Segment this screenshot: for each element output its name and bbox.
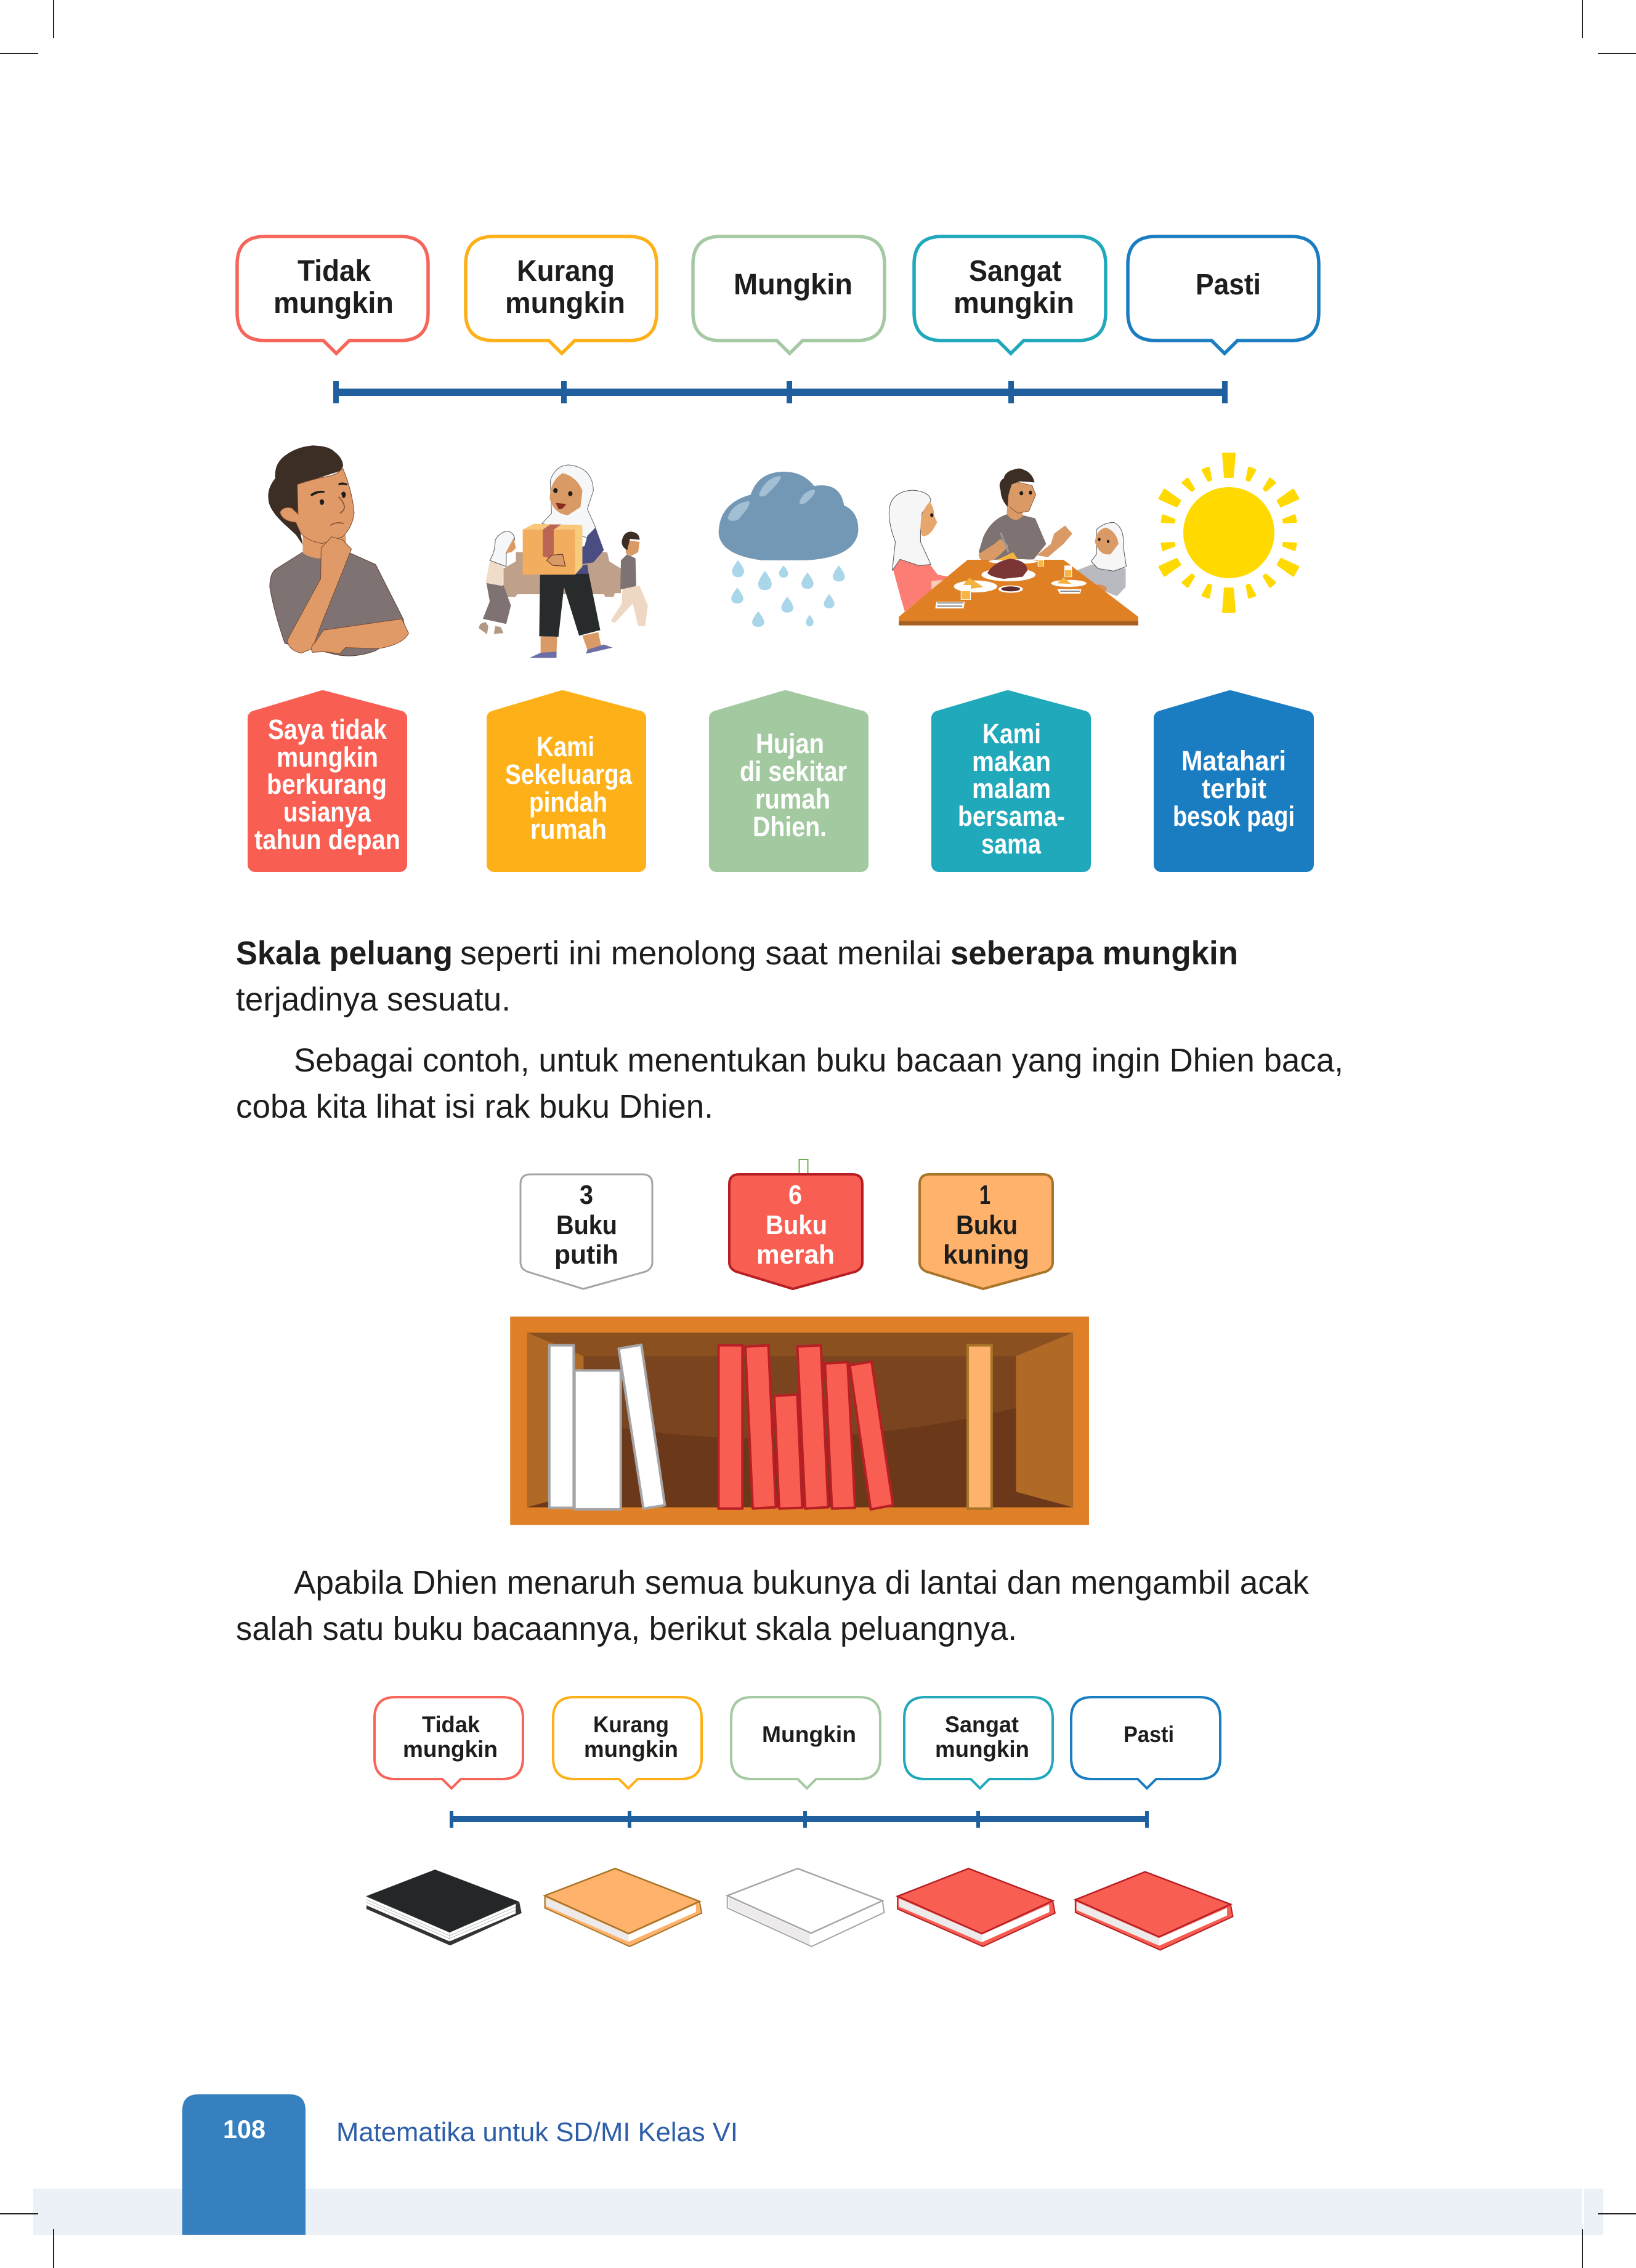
daughter (1076, 522, 1127, 596)
tag: 1 Buku kuning: 1 (979, 1180, 990, 1210)
paragraph: Apabila Dhien: Apabila Dhien menaruh semua bukunya di lantai dan mengambil acak (294, 1564, 1310, 1601)
bubble: Mungkin: Mungkin (734, 268, 852, 301)
statement card: Kami Sekeluarga pindah rumah (494, 698, 639, 865)
tag: 3 Buku putih: putih (554, 1240, 618, 1270)
book: orange (545, 1868, 702, 1947)
statement card: Saya tidak mungkin berkurang usianya tahun depan: tahun depan (254, 824, 400, 855)
tag: 6 Buku merah (729, 1174, 862, 1289)
small bubble: Tidak mungkin (375, 1697, 523, 1788)
statement card: Matahari terbit besok pagi: besok pagi (1173, 801, 1295, 832)
illustration: family dinner (889, 469, 1138, 626)
bubble: Kurang mungkin (466, 236, 657, 353)
table (899, 560, 1138, 621)
statement card: Matahari terbit besok pagi: terbit (1202, 773, 1266, 804)
face (549, 473, 583, 515)
book: red (897, 1868, 1055, 1947)
small bubble: Tidak mungkin: mungkin (403, 1737, 498, 1762)
white books (549, 1345, 665, 1509)
hijab (542, 465, 596, 538)
statement card: Kami makan malam bersama-sama: sama (981, 828, 1042, 860)
tag: 3 Buku putih: Buku (556, 1210, 617, 1240)
book: black (366, 1870, 522, 1945)
statement card: Kami Sekeluarga pindah rumah: pindah (529, 786, 607, 818)
statement card: Kami Sekeluarga pindah rumah: Kami (537, 731, 594, 762)
small bubble: Pasti (1071, 1697, 1220, 1788)
paragraph: contoh rak buku (236, 1042, 1343, 1125)
bubble: Tidak mungkin: Tidak (298, 255, 371, 288)
paragraph: skala peluang (236, 935, 1238, 1018)
mother (889, 490, 950, 611)
page number tab (182, 2094, 306, 2235)
paragraph: contoh rak buku: coba kita lihat isi rak buku Dhien. (236, 1088, 713, 1125)
statement card: Hujan di sekitar rumah Dhien: Hujan (756, 728, 824, 759)
box (523, 524, 583, 530)
statement card: Saya tidak mungkin berkurang usianya tahun depan (254, 698, 400, 865)
bubble: Kurang mungkin: mungkin (505, 287, 625, 320)
paragraph: skala peluang: seperti ini menolong saat menilai (460, 935, 942, 972)
small bubble: Sangat mungkin (904, 1697, 1053, 1788)
illustration: sun (1160, 454, 1298, 611)
boy (610, 531, 648, 626)
statement card: Hujan di sekitar rumah Dhien: rumah (755, 783, 830, 815)
scale line bottom (450, 1811, 1149, 1828)
illustration: rain cloud (719, 472, 858, 627)
statement card: Saya tidak mungkin berkurang usianya tahun depan: berkurang (267, 769, 387, 800)
statement card: Saya tidak mungkin berkurang usianya tahun depan: usianya (283, 796, 371, 828)
statement card: Kami makan malam bersama-sama: Kami (982, 718, 1041, 749)
tag: 3 Buku putih (520, 1174, 652, 1289)
small bubble: Sangat mungkin: Sangat (945, 1712, 1019, 1737)
pants (539, 574, 601, 637)
paragraph: contoh rak buku: Sebagai contoh, untuk menentukan buku bacaan yang ingin Dhien baca, (294, 1042, 1343, 1079)
small bubble: Mungkin: Mungkin (762, 1722, 856, 1747)
statement card: Matahari terbit besok pagi (1161, 698, 1306, 865)
bubble: Kurang mungkin: Kurang (517, 255, 615, 288)
statement card: Kami makan malam bersama-sama (939, 698, 1083, 865)
paragraph: skala peluang: seberapa mungkin (950, 935, 1238, 972)
small bubble: Sangat mungkin: mungkin (935, 1737, 1029, 1762)
paragraph: skala peluang: Skala peluang (236, 935, 453, 972)
orange book (968, 1346, 992, 1509)
illustration: thinking man (268, 445, 408, 656)
bubble: Tidak mungkin (237, 236, 428, 353)
statement card: Hujan di sekitar rumah Dhien (716, 698, 861, 865)
tag: 1 Buku kuning: Buku (956, 1210, 1018, 1240)
bubble: Tidak mungkin: mungkin (273, 287, 394, 320)
tag: 1 Buku kuning: kuning (943, 1240, 1029, 1270)
small bubble: Pasti: Pasti (1124, 1722, 1174, 1747)
girl (479, 531, 516, 634)
statement card: Kami Sekeluarga pindah rumah: Sekeluarga (505, 759, 633, 790)
page number tab: 108 (223, 2115, 265, 2144)
tag: 3 Buku putih: 3 (580, 1180, 593, 1210)
book: red second (1075, 1872, 1233, 1950)
tag: 6 Buku merah: Buku (766, 1210, 827, 1240)
small bubble: Tidak mungkin: Tidak (422, 1712, 480, 1737)
paragraph: skala peluang: terjadinya sesuatu. (236, 981, 511, 1018)
bubble: Mungkin (693, 236, 885, 353)
bookshelf with books (510, 1317, 1089, 1525)
tag: 6 Buku merah: merah (756, 1240, 835, 1270)
father (979, 469, 1072, 565)
statement card: Hujan di sekitar rumah Dhien: di sekitar (740, 756, 847, 787)
bubble: Pasti: Pasti (1196, 268, 1261, 301)
small bubble: Mungkin (731, 1697, 880, 1788)
small bubble: Kurang mungkin: mungkin (584, 1737, 678, 1762)
sofa (503, 552, 621, 597)
probability scale top: speech bubbles (237, 236, 1319, 353)
statement card: Saya tidak mungkin berkurang usianya tahun depan: Saya tidak (268, 714, 387, 745)
plates and food (935, 552, 1087, 608)
bubble: Sangat mungkin: mungkin (954, 287, 1074, 320)
blue sleeve and torso (562, 528, 604, 575)
paragraph: Apabila Dhien (236, 1564, 1310, 1647)
bubble: Sangat mungkin (914, 236, 1106, 353)
statement card: Kami makan malam bersama-sama: malam (972, 773, 1051, 804)
probability scale bottom: speech bubbles (375, 1697, 1220, 1788)
small bubble: Kurang mungkin (553, 1697, 702, 1788)
statement card: Hujan di sekitar rumah Dhien: Dhien. (753, 811, 827, 842)
scale line top (333, 381, 1228, 403)
statement card: Kami makan malam bersama-sama: makan (972, 746, 1051, 777)
tag: 1 Buku kuning (920, 1174, 1053, 1289)
statement card: Kami Sekeluarga pindah rumah: rumah (530, 813, 607, 845)
bubble: Pasti (1128, 236, 1319, 353)
tag: 6 Buku merah: 6 (788, 1180, 802, 1210)
statement card: Kami makan malam bersama-sama: bersama- (958, 801, 1065, 832)
footer title: Matematika untuk SD/MI Kelas VI (336, 2117, 738, 2147)
bubble: Sangat mungkin: Sangat (969, 255, 1061, 288)
statement card: Matahari terbit besok pagi: Matahari (1181, 745, 1286, 777)
footer band (33, 2189, 1603, 2235)
red books (718, 1346, 893, 1509)
illustration: family moving house (479, 465, 648, 658)
book: white (727, 1868, 884, 1947)
paragraph: Apabila Dhien: salah satu buku bacaannya, berikut skala peluangnya. (236, 1610, 1017, 1647)
statement card: Saya tidak mungkin berkurang usianya tahun depan: mungkin (277, 741, 378, 773)
small bubble: Kurang mungkin: Kurang (593, 1712, 669, 1737)
